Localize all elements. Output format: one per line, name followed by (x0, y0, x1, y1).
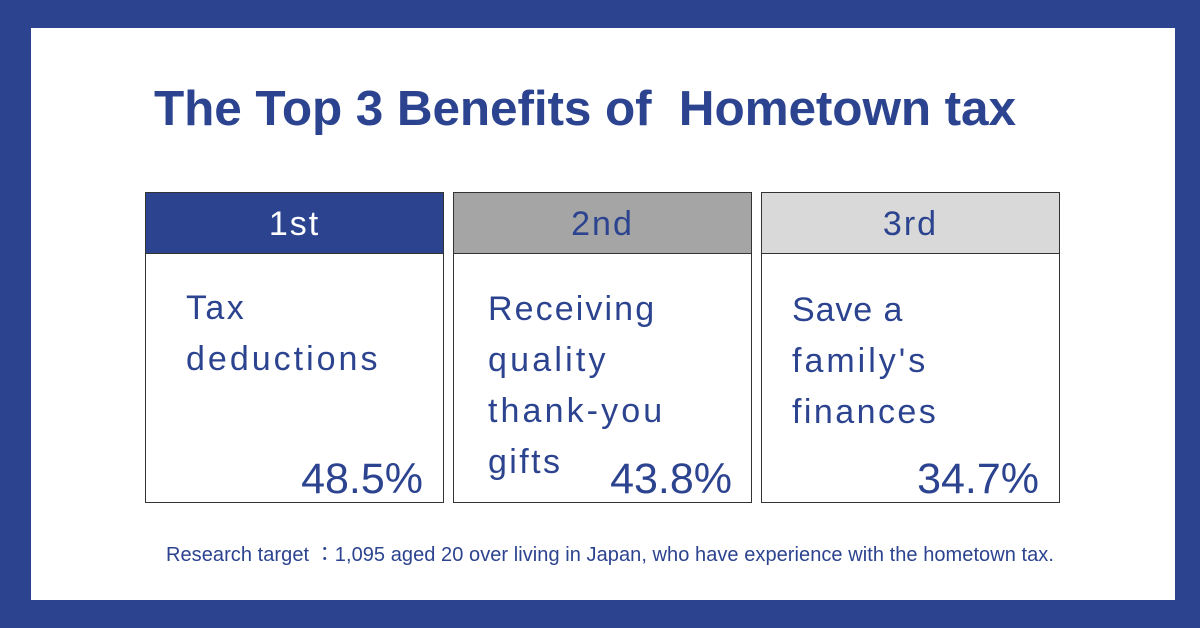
text: Tax deductions: Tax deductions (186, 289, 380, 378)
heading: 1st: 1st (269, 205, 320, 243)
heading: 2nd: 2nd (571, 205, 634, 243)
text: Save a family's finances: Save a family's finances (792, 291, 938, 431)
title: The Top 3 Benefits of Hometown tax (154, 81, 1016, 136)
panel: 3rd place (761, 192, 1060, 503)
footnote: research target: Research target ：1,095 aged 20 over living in Japan, who have experience with the hometown tax. (166, 544, 1054, 566)
heading: 2nd (454, 193, 751, 254)
number: 34.7%: 34.7% (917, 455, 1039, 503)
panel: 1st place (145, 192, 444, 503)
panel: 2nd place (453, 192, 752, 503)
heading: 3rd: 3rd (883, 205, 938, 243)
number: 43.8%: 43.8% (610, 455, 732, 503)
heading: 3rd (762, 193, 1059, 254)
heading: 1st (146, 193, 443, 254)
number: 48.5%: 48.5% (301, 455, 423, 503)
text: Receiving quality thank-you gifts: Receiving quality thank-you gifts (488, 290, 665, 481)
